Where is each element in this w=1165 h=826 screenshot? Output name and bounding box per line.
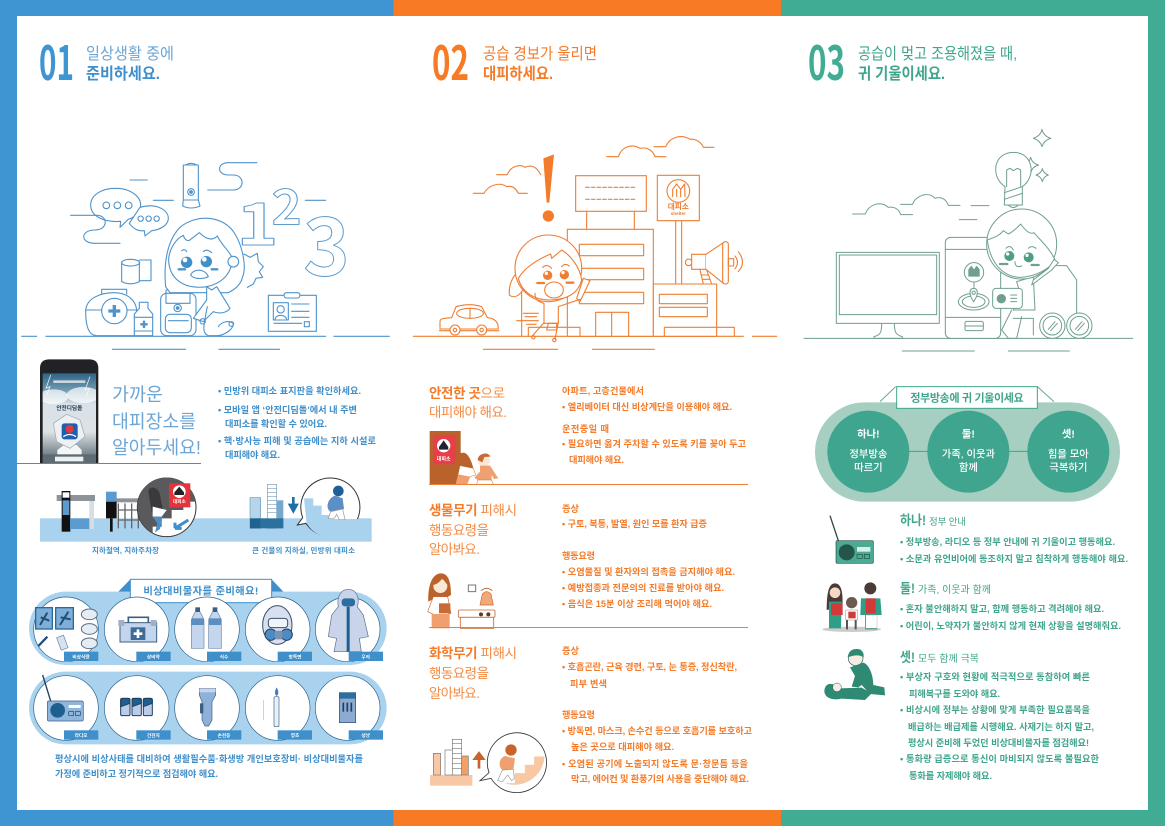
shelter sign: 대피소 xyxy=(668,201,689,211)
heading: biological: 생물무기 피해시 xyxy=(429,503,517,518)
illustration: girl running to shelter xyxy=(413,137,777,349)
item: raincoat xyxy=(328,589,368,652)
supply labels: 성냥 xyxy=(361,732,371,738)
item: first aid box xyxy=(118,617,157,642)
section: one, government guidance xyxy=(830,513,1128,564)
icon: megaphone xyxy=(685,242,742,284)
tips: chemical xyxy=(562,645,753,784)
section: two, with family and neighbors: 가족, 이웃과 함께 xyxy=(918,584,991,596)
heading: biological: 행동요령을 xyxy=(429,523,489,538)
section: three, overcome together: 모두 함께 극복 xyxy=(918,653,979,665)
shelter tips: 대피소를 확인할 수 있어요. xyxy=(225,418,327,429)
panel: 02 evacuate xyxy=(413,25,777,793)
heading: know nearby shelters: 가까운 xyxy=(112,384,163,405)
item: matches xyxy=(339,693,356,723)
shelter scene illustration xyxy=(40,477,372,542)
section: three, overcome together: • 부상자 구호와 현황에 적극적으로 동참하여 빠른 xyxy=(900,671,1091,682)
shelter sign xyxy=(657,175,699,284)
supplies title: 비상대비물자를 준비해요! xyxy=(143,584,258,597)
tips: chemical: 피부 변색 xyxy=(570,678,607,689)
icon: glasses xyxy=(1040,313,1092,338)
heading 03 xyxy=(808,25,1017,94)
tips: safe place: 운전중일 때 xyxy=(562,423,609,434)
circle: person going down stairs xyxy=(297,478,360,538)
numbers 1 2 3: 1 xyxy=(237,180,278,262)
captions: 큰 건물의 지하실, 민방위 대피소 xyxy=(252,545,355,555)
supplies title xyxy=(118,579,283,603)
icon: sparkles xyxy=(1023,129,1051,182)
supply labels: 양초 xyxy=(291,732,300,738)
tips: chemical: 높은 곳으로 대피해야 해요. xyxy=(571,741,674,752)
illustration: worried girl with supplies xyxy=(22,163,389,349)
clouds xyxy=(473,137,714,193)
heading 01: 준비하세요. xyxy=(86,65,160,83)
heading: know nearby shelters: 알아두세요! xyxy=(112,437,201,458)
supply labels: 우의 xyxy=(361,653,370,660)
shelter tips: 대피해야 해요. xyxy=(225,449,280,460)
supply labels: 상비약 xyxy=(147,653,160,660)
white circles xyxy=(34,597,380,740)
exclamation mark xyxy=(543,154,554,222)
numbers 1 2 3: 3 xyxy=(303,185,350,299)
section: one, government guidance: • 정부방송, 라디오 등 정부 안내에 귀 기울이고 행동해요. xyxy=(900,536,1115,547)
illustration: shelter door: 대피소 xyxy=(437,455,451,462)
icon: car xyxy=(439,305,499,335)
clouds xyxy=(853,195,960,215)
section: three, overcome together: 셋! xyxy=(900,650,915,665)
heading: know nearby shelters: 대피장소를 xyxy=(112,411,196,432)
heading 02: 대피하세요. xyxy=(483,65,553,83)
illustration: cooking xyxy=(428,573,495,628)
tips: biological: • 구토, 복통, 발열, 원인 모를 환자 급증 xyxy=(562,518,708,529)
diagram: listen to government broadcast: 셋! xyxy=(1062,428,1075,441)
supplies note: 평상시에 비상사태를 대비하여 생활필수품·화생방 개인보호장비· 비상대비물자를 xyxy=(55,753,364,764)
circle: girl entering shelter: 대피소 xyxy=(173,498,186,505)
diagram: listen to government broadcast: 극복하기 xyxy=(1049,461,1087,474)
captions xyxy=(92,545,355,555)
section: one, government guidance: • 소문과 유언비어에 동조하지 말고 침착하게 행동해야 해요. xyxy=(900,553,1128,564)
heading: biological: 알아봐요. xyxy=(429,542,480,557)
tips: safe place: 대피해야 해요. xyxy=(569,454,624,465)
item: emergency food xyxy=(36,608,97,650)
tips: biological: 행동요령 xyxy=(562,550,595,561)
item: candle xyxy=(264,687,279,727)
icon: ID card xyxy=(268,293,316,331)
diagram: listen to government broadcast: 둘! xyxy=(962,429,975,441)
heading 01 xyxy=(39,25,174,94)
section: three, overcome together xyxy=(824,649,1100,781)
tips: chemical: 행동요령 xyxy=(562,709,595,720)
parking entrance xyxy=(106,492,142,532)
heading 03: 03 xyxy=(808,25,845,94)
icon: phone with shelter map xyxy=(945,237,1001,338)
heading 01: 일상생활 중에 xyxy=(86,45,174,63)
tips: biological: • 예방접종과 전문의의 진료를 받아야 해요. xyxy=(562,582,724,593)
diagram: listen to government broadcast: 정부방송 xyxy=(849,448,887,461)
lower building xyxy=(653,284,734,336)
subway entrance xyxy=(57,491,95,532)
tips: chemical: 막고, 에어컨 및 환풍기의 사용을 중단해야 해요. xyxy=(571,773,749,784)
supply labels: 방독면 xyxy=(289,653,301,660)
section: two, with family and neighbors: • 어린이, 노약자가 불안하지 않게 현재 상황을 설명해줘요. xyxy=(900,620,1121,631)
section: three, overcome together: 배급하는 배급제를 시행해요. 사재기는 하지 말고, xyxy=(908,721,1094,732)
item: batteries xyxy=(121,698,152,716)
diagram: listen to government broadcast: 함께 xyxy=(959,461,978,474)
emergency supplies xyxy=(29,579,387,744)
item: gas mask xyxy=(263,606,292,644)
section: two, with family and neighbors: 둘! xyxy=(900,581,915,596)
section: three, overcome together: • 비상시에 정부는 상황에 맞게 부족한 필요품목을 xyxy=(900,704,1091,715)
shelter sign: shelter xyxy=(671,211,686,216)
item: flashlight xyxy=(199,688,216,726)
numbers 1 2 3: 2 xyxy=(272,170,302,239)
tips: biological xyxy=(562,503,735,609)
heading 02 xyxy=(432,25,597,94)
supply labels xyxy=(64,652,383,740)
icon: radio xyxy=(830,516,873,563)
icon: monitor xyxy=(836,252,939,338)
tips: biological: 증상 xyxy=(562,503,580,514)
numbers 1 2 3 xyxy=(237,170,350,299)
heading: biological xyxy=(429,503,517,557)
heading 02: 공습 경보가 울리면 xyxy=(483,45,597,63)
supply labels: 비상식량 xyxy=(72,653,90,660)
backpack behind boy xyxy=(1057,266,1077,314)
icon: first aid kit xyxy=(86,289,137,336)
icon: lantern xyxy=(183,163,200,208)
tips: chemical: • 호흡곤란, 근육 경련, 구토, 눈 통증, 정신착란, xyxy=(562,661,737,672)
tips: safe place: • 엘리베이터 대신 비상계단을 이용해야 해요. xyxy=(562,401,732,412)
section: three, overcome together: 평상시 준비해 두었던 비상대비물자를 점검해요! xyxy=(908,737,1089,748)
heading 03: 공습이 멎고 조용해졌을 때, xyxy=(858,45,1017,63)
icon: light bulb xyxy=(996,152,1031,207)
supply labels: 식수 xyxy=(220,653,229,660)
tips: safe place: 아파트, 고층건물에서 xyxy=(562,385,644,396)
icon: CPR xyxy=(824,649,885,700)
section: one, government guidance: 하나! xyxy=(900,513,926,528)
section: safe place xyxy=(429,385,748,485)
phone: safety app: 안전디딤돌 xyxy=(56,404,82,412)
panel: 01 prepare xyxy=(17,25,389,779)
heading 02: 02 xyxy=(432,25,469,94)
diagram: listen to government broadcast: 힘을 모아 xyxy=(1048,448,1089,461)
section: two, with family and neighbors xyxy=(822,581,1121,632)
heading: safe place: 안전한 곳으로 xyxy=(429,386,505,401)
heading: chemical: 행동요령을 xyxy=(429,666,489,681)
heading: chemical: 알아봐요. xyxy=(429,686,480,701)
icon: family xyxy=(822,582,882,632)
building and billboard xyxy=(522,176,653,336)
supplies note xyxy=(55,753,364,779)
tips: chemical: 증상 xyxy=(562,645,580,656)
panel: 03 listen xyxy=(804,25,1133,781)
heading 01: 01 xyxy=(39,25,74,94)
tips: chemical: • 오염된 공기에 노출되지 않도록 문·창문틈 등을 xyxy=(562,758,749,769)
diagram: listen to government broadcast xyxy=(815,387,1120,502)
character: girl xyxy=(165,218,244,336)
phone: safety app xyxy=(38,359,100,463)
supply labels: 건전지 xyxy=(147,732,160,739)
item: radio xyxy=(43,675,83,721)
buildings going down xyxy=(250,484,297,528)
tips: chemical: • 방독면, 마스크, 손수건 등으로 호흡기를 보호하고 xyxy=(562,725,753,736)
icon: toilet roll xyxy=(122,259,151,284)
tips: safe place xyxy=(562,385,747,465)
character: girl with phone xyxy=(509,235,590,342)
icon: backpack xyxy=(161,290,196,336)
diagram: listen to government broadcast: 하나! xyxy=(857,428,880,441)
section: two, with family and neighbors: • 혼자 불안해하지 말고, 함께 행동하고 격려해야 해요. xyxy=(900,603,1104,614)
speed lines xyxy=(517,313,538,324)
heading: know nearby shelters xyxy=(112,384,201,458)
section: chemical weapons xyxy=(429,645,753,793)
section: one, government guidance: 정부 안내 xyxy=(929,517,966,528)
section: three, overcome together: 통화를 자제해야 해요. xyxy=(909,770,992,781)
item: water xyxy=(191,607,221,648)
circle: girl entering shelter xyxy=(137,477,196,537)
heading: chemical xyxy=(429,646,517,701)
shelter tips: • 민방위 대피소 표지판을 확인하세요. xyxy=(218,385,361,396)
section: three, overcome together: • 통화량 급증으로 통신이 마비되지 않도록 불필요한 xyxy=(900,753,1100,764)
supply labels: 손전등 xyxy=(218,732,231,738)
tips: safe place: • 필요하면 옮겨 주차할 수 있도록 키를 꽂아 두고 xyxy=(562,438,747,449)
shelter tips: • 모바일 앱 ‘안전디딤돌’에서 내 주변 xyxy=(218,404,357,415)
icon: burst xyxy=(244,253,263,287)
section: three, overcome together: 피해복구를 도와야 해요. xyxy=(909,688,1000,699)
illustration: going uphill to high ground xyxy=(430,733,547,793)
diagram: listen to government broadcast: 정부방송에 귀 기울이세요 xyxy=(910,391,1024,405)
icon: speech bubbles xyxy=(71,188,168,243)
heading: chemical: 화학무기 피해시 xyxy=(429,646,517,661)
diagram: listen to government broadcast: 가족, 이웃과 xyxy=(942,449,995,461)
icon: medicine bottle xyxy=(134,302,153,336)
illustration: boy with radio xyxy=(804,129,1133,351)
supply labels: 라디오 xyxy=(75,732,88,739)
tips: biological: • 오염물질 및 환자와의 접촉을 금지해야 해요. xyxy=(562,566,735,577)
shelter tips xyxy=(218,385,377,460)
diagram: listen to government broadcast: 따르기 xyxy=(854,462,883,474)
supplies note: 가정에 준비하고 정기적으로 점검해야 해요. xyxy=(55,768,218,779)
tips: biological: • 음식은 15분 이상 조리해 먹어야 해요. xyxy=(562,598,712,609)
section: biological weapons xyxy=(428,503,748,628)
character: boy xyxy=(987,209,1058,338)
section: safe place: 대피해야 해요. xyxy=(429,405,507,420)
heading 03: 귀 기울이세요. xyxy=(858,65,945,83)
illustration: shelter door xyxy=(430,431,498,484)
captions: 지하철역, 지하주차장 xyxy=(92,545,159,555)
shelter tips: • 핵·방사능 피해 및 공습에는 지하 시설로 xyxy=(218,435,377,446)
